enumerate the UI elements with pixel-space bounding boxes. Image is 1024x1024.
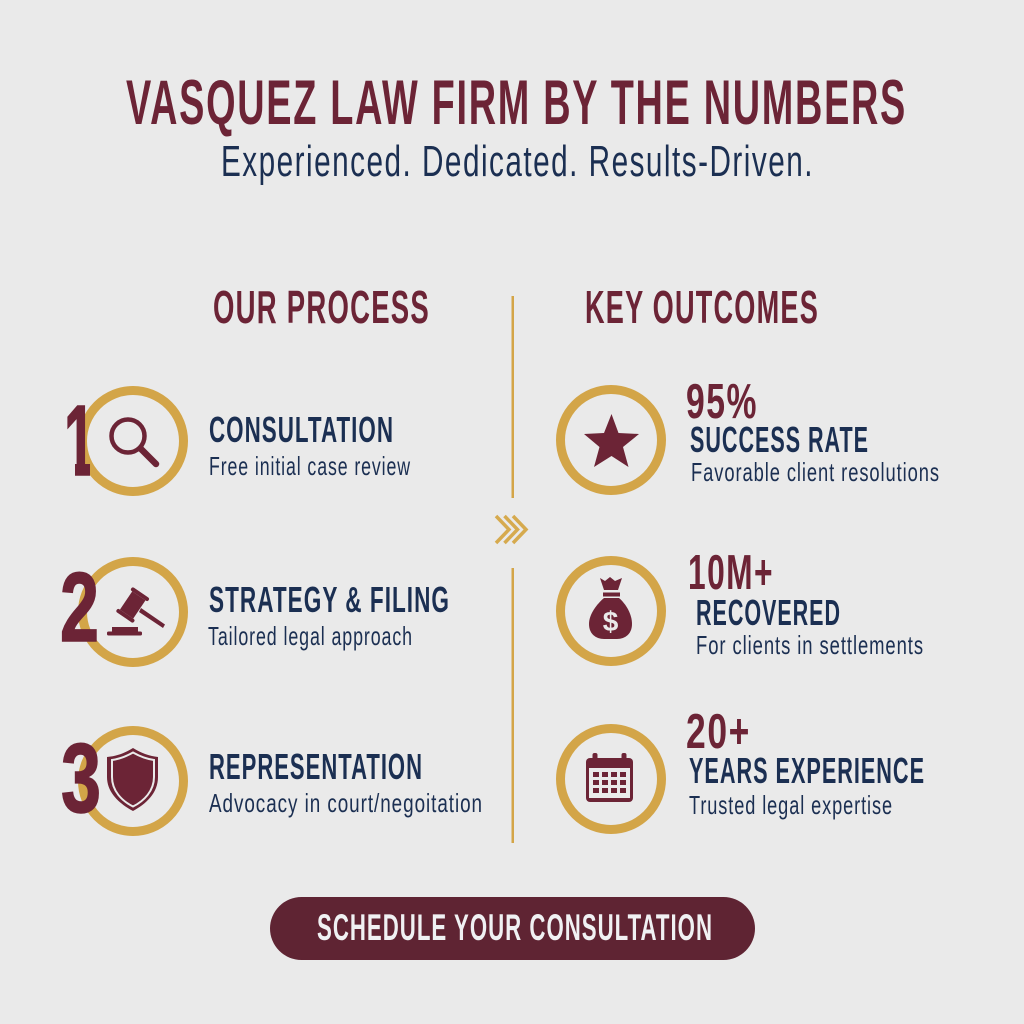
icon: money bag	[589, 577, 632, 639]
stat 20+: 20+	[686, 705, 751, 759]
outcome 1: success rate	[560, 375, 940, 490]
icon: magnifier	[112, 420, 156, 464]
number 3: 3	[61, 723, 101, 833]
number 1: 1	[64, 385, 95, 497]
icon: star	[584, 414, 639, 467]
step 1 title: CONSULTATION	[209, 409, 394, 450]
heading: key outcomes: KEY OUTCOMES	[585, 281, 819, 333]
number 2: 2	[60, 552, 99, 662]
step 1: consultation	[64, 385, 411, 497]
icon: money bag: $	[603, 606, 619, 637]
step 1 description: Free initial case review	[209, 451, 411, 481]
outcome 3 description: Trusted legal expertise	[689, 790, 893, 820]
step 2 description: Tailored legal approach	[208, 621, 413, 651]
outcome 2 title: RECOVERED	[696, 592, 841, 633]
heading: our process: OUR PROCESS	[213, 281, 430, 333]
outcome 2 description: For clients in settlements	[696, 630, 924, 660]
icon: calendar	[586, 753, 633, 802]
step 2: strategy and filing	[60, 552, 450, 662]
panel: our process	[60, 385, 483, 833]
step 3: representation	[61, 723, 483, 833]
panel: key outcomes	[560, 375, 940, 830]
stat 10M+: 10M+	[688, 546, 774, 600]
outcome 2: recovered	[560, 546, 924, 662]
icon: gavel	[107, 587, 165, 636]
center divider with chevrons	[496, 296, 526, 843]
step 3 title: REPRESENTATION	[209, 746, 423, 787]
step 2 title: STRATEGY & FILING	[209, 579, 450, 620]
call to action button	[270, 897, 755, 960]
outcome 1 title: SUCCESS RATE	[690, 419, 869, 460]
outcome 3: years experience	[560, 705, 925, 830]
stat 95%: 95%	[686, 375, 758, 429]
infographic	[62, 80, 938, 960]
icon: shield	[107, 748, 158, 811]
icon: chevrons arrow	[496, 516, 526, 543]
call to action button: SCHEDULE YOUR CONSULTATION	[317, 907, 713, 948]
step 3 description: Advocacy in court/negoitation	[209, 788, 483, 818]
